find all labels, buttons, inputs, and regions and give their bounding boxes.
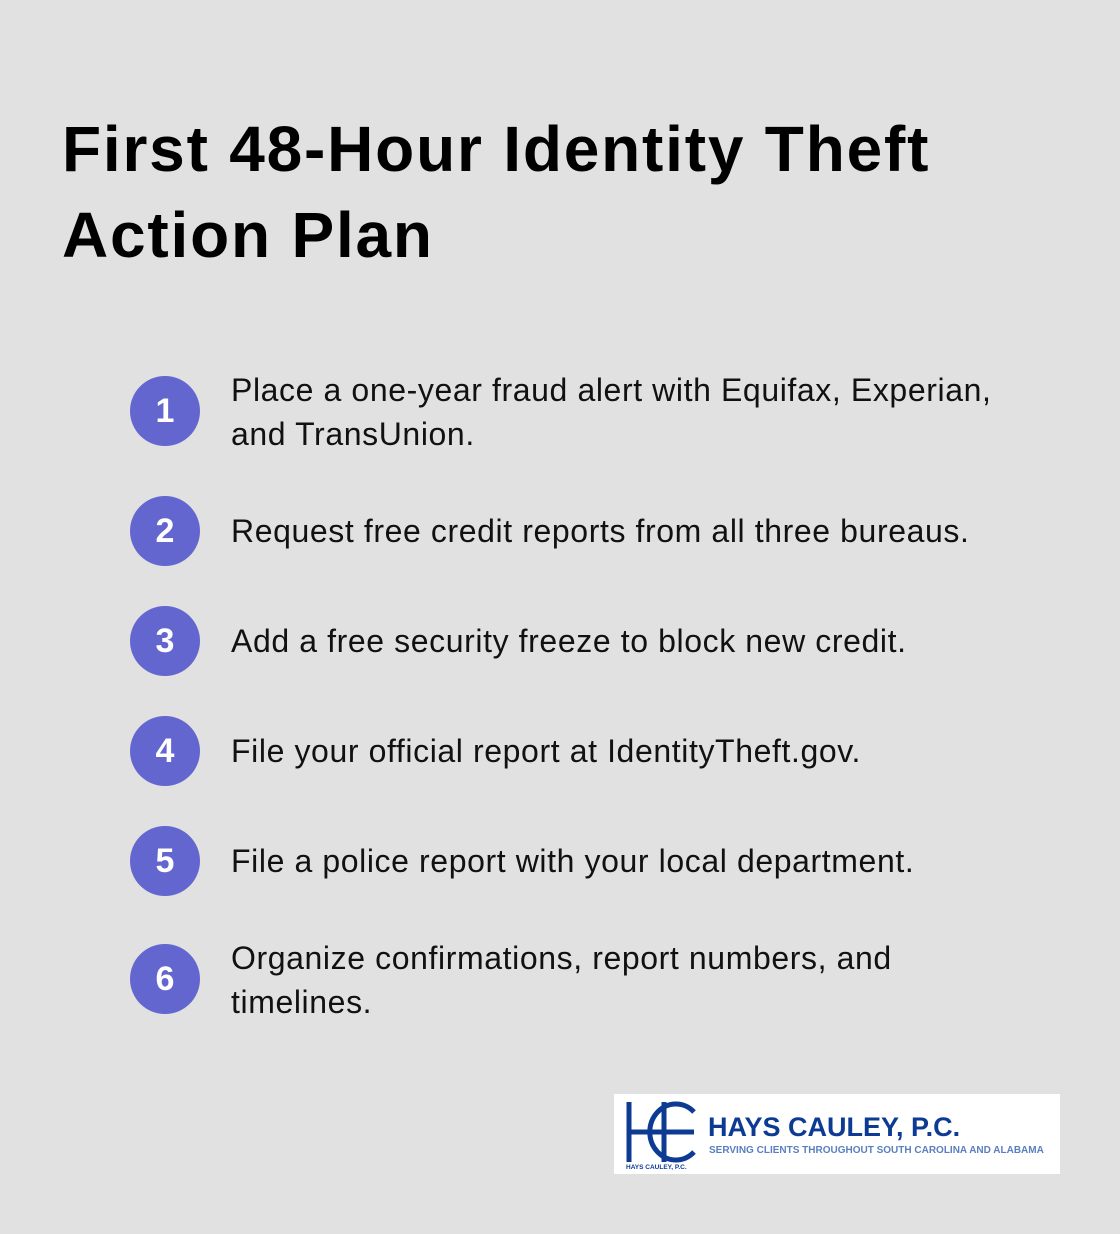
text: Place a one-year fraud alert with Equifax, Experian, [231,372,991,408]
icon: HC monogram [626,1102,696,1162]
step 3 [130,606,907,676]
text: File a police report with your local department. [231,843,914,879]
text: 4 [156,732,174,770]
text: File your official report at IdentityTheft.gov. [231,733,861,769]
step 6 [130,940,892,1020]
text: Request free credit reports from all three bureaus. [231,513,970,549]
title: Action Plan [62,199,434,271]
text: 2 [156,512,174,550]
title [62,113,930,271]
text: timelines. [231,984,372,1020]
step 5 [130,826,914,896]
logo: HAYS CAULEY, P.C. [708,1112,960,1142]
logo: HAYS CAULEY, P.C. [626,1164,687,1171]
step 2 [130,496,970,566]
step 4 [130,716,861,786]
text: 5 [156,842,174,880]
text: and TransUnion. [231,416,475,452]
title: First 48-Hour Identity Theft [62,113,930,185]
text: 6 [156,960,174,998]
text: 1 [156,392,174,430]
text: 3 [156,622,174,660]
text: Organize confirmations, report numbers, and [231,940,892,976]
text: Add a free security freeze to block new credit. [231,623,907,659]
logo [614,1094,1060,1174]
logo: SERVING CLIENTS THROUGHOUT SOUTH CAROLINA AND ALABAMA [709,1145,1044,1156]
step 1 [130,372,991,452]
